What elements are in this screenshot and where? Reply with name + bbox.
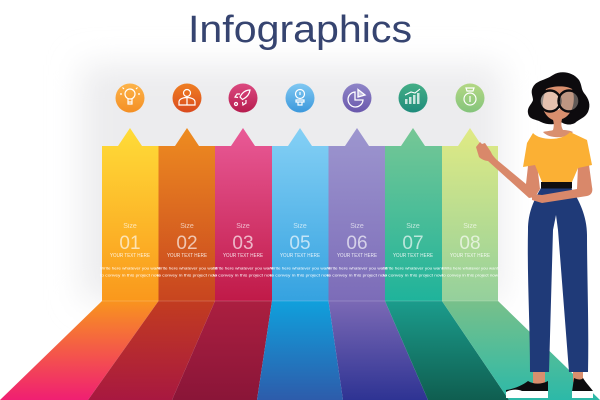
- column text: 07: 07: [402, 233, 424, 254]
- column text: 01: 01: [119, 233, 141, 254]
- column text: 01: Size: [123, 223, 137, 230]
- glasses: [540, 90, 580, 112]
- column text: 03: to convey in this project now: [213, 272, 273, 278]
- icon: medal: [456, 84, 484, 112]
- icon: rocket: [228, 84, 258, 112]
- column text: 01: [100, 223, 161, 278]
- title: Infographics: [188, 9, 412, 51]
- column text: 07: [383, 223, 444, 278]
- column text: 02: YOUR TEXT HERE: [167, 253, 208, 259]
- woman presenter: [476, 72, 593, 398]
- column text: 06: [327, 223, 388, 278]
- hair: [528, 72, 589, 125]
- column text: 02: Write here whatever you want: [157, 266, 218, 270]
- column text: 05: YOUR TEXT HERE: [280, 253, 321, 259]
- column text: 06: YOUR TEXT HERE: [337, 253, 378, 259]
- left arm and hand: [476, 142, 540, 198]
- face and neck: [543, 86, 574, 137]
- column text: 06: Write here whatever you want: [327, 266, 388, 270]
- column text: 03: [213, 223, 274, 278]
- column text: 03: 03: [232, 233, 254, 254]
- ankles: [533, 372, 583, 384]
- column text: 01: Write here whatever you want: [100, 266, 161, 270]
- column text: 06: 06: [346, 233, 368, 254]
- column text: 08: Size: [463, 223, 477, 230]
- yellow shirt: [523, 132, 592, 182]
- column text: 03: Write here whatever you want: [213, 266, 274, 270]
- column text: 02: 02: [176, 233, 198, 254]
- column text: 05: Size: [293, 223, 307, 230]
- shoes: [506, 378, 593, 398]
- column text: 07: Size: [406, 223, 420, 230]
- column text: 01: to convey in this project now: [100, 272, 160, 278]
- column text: 07: YOUR TEXT HERE: [393, 253, 434, 259]
- column text: 02: [157, 223, 218, 278]
- column text: 03: Size: [236, 223, 250, 230]
- perspective floor: [0, 301, 600, 400]
- column text: 08: to convey in this project now: [442, 272, 498, 278]
- column text: 08: 08: [459, 233, 481, 254]
- column text: 01: YOUR TEXT HERE: [110, 253, 151, 259]
- column text: 05: [270, 223, 331, 278]
- column text: 07: to convey in this project now: [383, 272, 443, 278]
- column text: 08: YOUR TEXT HERE: [450, 253, 491, 259]
- column text: 08: Write here whatever you want: [442, 266, 499, 270]
- column text: 07: Write here whatever you want: [383, 266, 444, 270]
- mouth: [555, 108, 560, 110]
- column text: 05: 05: [289, 233, 311, 254]
- icon: pie chart: [342, 84, 372, 112]
- icon: growth chart: [398, 84, 428, 112]
- column text: 06: Size: [350, 223, 364, 230]
- arrow columns: [102, 128, 498, 302]
- icon: light bulb: [116, 84, 144, 112]
- belt: [541, 182, 572, 188]
- column text: 08: [442, 223, 499, 278]
- pants: [528, 188, 588, 372]
- icon: idea badge: [286, 84, 314, 112]
- icon: person: [172, 84, 202, 112]
- column text: 02: Size: [180, 223, 194, 230]
- column text: 06: to convey in this project now: [327, 272, 387, 278]
- column text: 03: YOUR TEXT HERE: [223, 253, 264, 259]
- column text: 02: to convey in this project now: [157, 272, 217, 278]
- column text: 05: Write here whatever you want: [270, 266, 331, 270]
- right arm and forearm: [532, 165, 592, 203]
- column text: 05: to convey in this project now: [270, 272, 330, 278]
